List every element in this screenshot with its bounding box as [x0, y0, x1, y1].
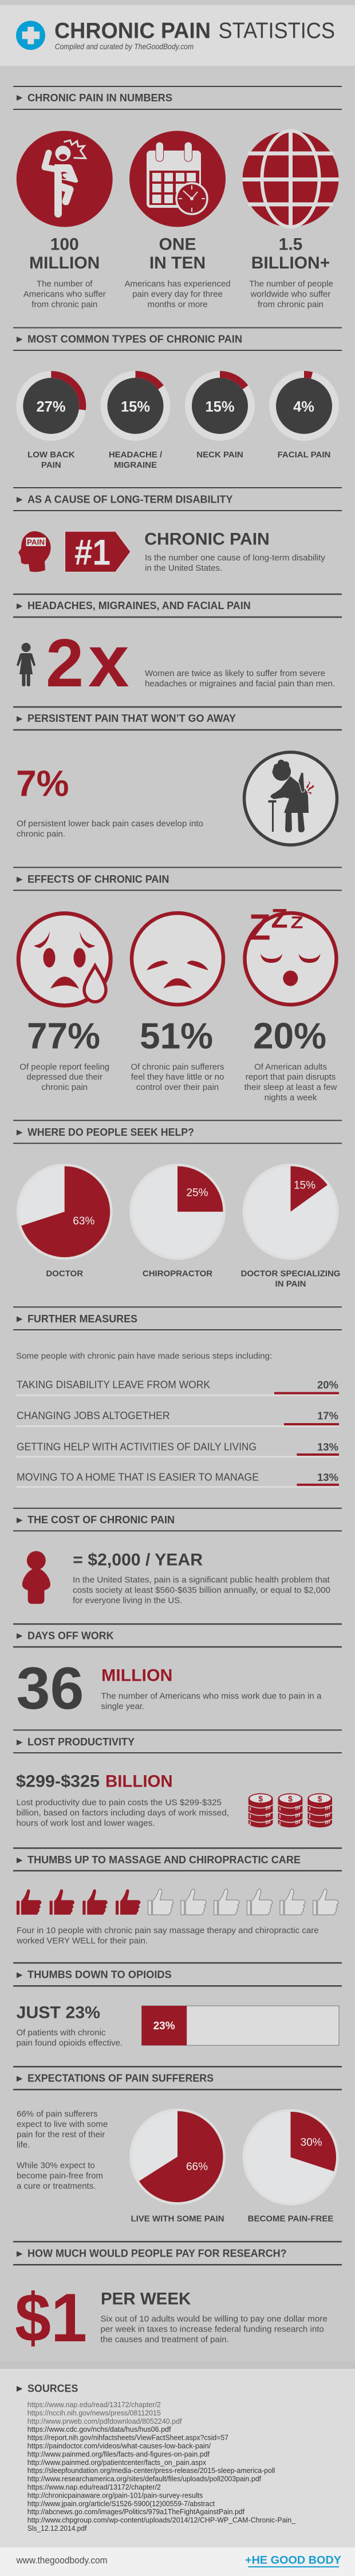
section: thumbs up	[13, 1847, 342, 1946]
stat: 1.5 billion	[243, 131, 339, 310]
source list: https://www.nap.edu/read/13172/chapter/2	[27, 2400, 161, 2409]
heading: thumbs down	[13, 1962, 342, 1986]
source list: http://chronicpainaware.org/pain-101/pain-survey-results	[27, 2491, 203, 2499]
bar row: changing jobs 17%: 17%	[317, 1410, 338, 1422]
value: just 23%: JUST 23%	[16, 2004, 100, 2022]
section: chronic pain in numbers	[13, 86, 342, 310]
progress bar: 23%	[142, 2006, 339, 2045]
heading: thumbs down: THUMBS DOWN TO OPIOIDS	[27, 1969, 172, 1980]
heading: most common types: MOST COMMON TYPES OF CHRONIC PAIN	[27, 334, 242, 345]
heading: most common types	[13, 327, 342, 351]
bar row: disability leave 20%: TAKING DISABILITY LEAVE FROM WORK	[17, 1378, 211, 1390]
description: Women are twice as likely to suffer from severe	[145, 669, 325, 678]
description: The number of	[37, 279, 93, 289]
icon: coin stacks: $	[258, 1794, 263, 1803]
source list	[27, 2400, 296, 2532]
badge: number one: #1	[74, 533, 111, 573]
heading: chronic pain in numbers: CHRONIC PAIN IN NUMBERS	[27, 92, 172, 104]
bar row: moving home 13%: 13%	[317, 1471, 338, 1483]
donut: low back pain 27%	[16, 371, 86, 470]
pie: doctor 63%	[17, 1164, 113, 1278]
donut: headache 15%: HEADACHE /	[109, 450, 163, 460]
heading: pay for research	[13, 2241, 342, 2266]
description: 20%: their sleep at least a few	[244, 1082, 337, 1092]
donut: facial pain 4%: 4%	[293, 399, 314, 415]
heading: expectations	[13, 2066, 342, 2091]
source list: http://www.jpain.org/article/S1526-5900(12)00559-7/abstract	[27, 2499, 215, 2508]
big number: 2x: 2	[46, 625, 84, 701]
heading: thumbs up	[13, 1847, 342, 1871]
stat: 77%: 77%	[27, 1016, 100, 1057]
icon: coin stacks: $	[318, 1794, 322, 1803]
bar row: moving home 13%: MOVING TO A HOME THAT IS EASIER TO MANAGE	[17, 1471, 259, 1483]
face: sleeping	[245, 904, 337, 1005]
pie: chiropractor 25%	[129, 1164, 226, 1278]
section: persistent pain	[13, 706, 342, 845]
description: chronic pain.	[17, 829, 65, 839]
heading: effects	[13, 867, 342, 891]
bar row: disability leave 20%	[16, 1378, 339, 1396]
donut: headache 15%	[101, 371, 171, 470]
title second part: STATISTICS	[219, 18, 335, 44]
description: 77%: Of people report feeling	[19, 1062, 109, 1072]
donut: headache 15%: MIGRAINE	[114, 460, 157, 470]
heading: days off work: DAYS OFF WORK	[27, 1630, 113, 1641]
pie: become pain-free 30%: BECOME PAIN-FREE	[248, 2214, 333, 2223]
source list: http://www.prweb.com/pdfdownload/8052240.pdf	[27, 2417, 182, 2425]
pie: doctor 63%: 63%	[73, 1215, 94, 1227]
big number: 2x: x	[88, 620, 129, 702]
heading: headaches: HEADACHES, MIGRAINES, AND FACIAL PAIN	[27, 600, 251, 611]
heading: further measures	[13, 1306, 342, 1330]
description: 20%: nights a week	[265, 1093, 317, 1103]
website: www.thegoodbody.com	[16, 2555, 108, 2566]
description: 66%: life.	[17, 2140, 30, 2150]
section: long-term disability	[13, 487, 342, 573]
description: Is the number one cause of long-term disability	[145, 553, 325, 563]
description: Of persistent lower back pain cases develop into	[17, 819, 203, 828]
icon: coin stacks	[249, 1793, 332, 1827]
pie: doctor 63%: DOCTOR	[46, 1269, 83, 1278]
section: days off work	[13, 1623, 342, 1722]
donut: neck pain 15%: 15%	[205, 399, 235, 415]
big number: 100	[50, 235, 79, 254]
description: Four in 10 people with chronic pain say massage therapy and chiropractic care	[17, 1926, 319, 1935]
pie: pain specialist 15%: DOCTOR SPECIALIZING	[241, 1269, 340, 1278]
donut: low back pain 27%: LOW BACK	[27, 450, 75, 460]
description: per week in taxes to increase federal funding research into	[101, 2325, 324, 2334]
pie: chiropractor 25%: 25%	[186, 1187, 208, 1199]
description: single year.	[101, 1701, 144, 1711]
heading: headaches	[13, 594, 342, 618]
donut: neck pain 15%: NECK PAIN	[196, 450, 243, 460]
description: The number of people	[249, 279, 333, 289]
description: The number of Americans who miss work due to pain in a	[101, 1691, 322, 1701]
source list: https://nccih.nih.gov/news/press/08112015	[27, 2408, 161, 2417]
bar row: changing jobs 17%: CHANGING JOBS ALTOGETHER	[17, 1409, 170, 1421]
value: per week: PER WEEK	[101, 2290, 191, 2309]
pie: live with some pain 66%	[129, 2109, 226, 2223]
donut: neck pain 15%	[185, 371, 255, 460]
description: 30%: become pain-free from	[17, 2171, 103, 2181]
section: pay for research	[13, 2241, 342, 2356]
thumbs: 4 of 10 highlighted	[16, 1889, 338, 1915]
description: 20%: Of American adults	[254, 1062, 327, 1072]
heading: persistent pain: PERSISTENT PAIN THAT WON’T GO AWAY	[27, 713, 236, 724]
heading: effects: EFFECTS OF CHRONIC PAIN	[27, 874, 169, 885]
face: crying	[18, 914, 111, 1005]
section: where do people seek help	[13, 1120, 342, 1289]
bar row: moving home 13%	[16, 1471, 339, 1488]
pie: pain specialist 15%: 15%	[294, 1180, 315, 1192]
subtitle: Compiled and curated by TheGoodBody.com	[55, 42, 194, 51]
description: in the United States.	[145, 563, 222, 573]
description: worked VERY WELL for their pain.	[16, 1936, 148, 1946]
description: 77%: chronic pain	[41, 1082, 88, 1092]
description: In the United States, pain is a significant public health problem that	[73, 1575, 330, 1585]
big number: $1: $1	[15, 2279, 87, 2356]
icon: person in pain	[17, 131, 113, 227]
value: range: $299-$325	[16, 1772, 100, 1791]
description: from chronic pain	[258, 300, 324, 310]
source list: https://www.cdc.gov/nchs/data/hus/hus06.pdf	[27, 2425, 171, 2433]
description: 51%: Of chronic pain sufferers	[131, 1062, 224, 1072]
source list: http://www.painmed.org/files/facts-and-figures-on-pain.pdf	[27, 2449, 210, 2458]
heading: long-term disability	[13, 487, 342, 511]
face: sleeping: Z	[291, 914, 303, 933]
description: pain every day for three	[132, 290, 223, 299]
icon: head with pain label	[18, 531, 51, 572]
heading: cost: THE COST OF CHRONIC PAIN	[27, 1514, 175, 1526]
intro text: Some people with chronic pain have made serious steps including:	[16, 1352, 272, 1361]
icon: head with pain label: PAIN	[27, 538, 45, 546]
section: expectations	[13, 2066, 342, 2223]
donut: facial pain 4%	[269, 371, 339, 460]
heading: seek help: WHERE DO PEOPLE SEEK HELP?	[27, 1127, 194, 1138]
source list: Sls_12.12.2014.pdf	[27, 2524, 87, 2532]
icon: medical cross logo	[16, 21, 45, 50]
icon: globe	[243, 131, 339, 227]
heading: expectations: EXPECTATIONS OF PAIN SUFFERERS	[27, 2073, 214, 2084]
stat: 100 million	[17, 131, 113, 310]
description: worldwide who suffer	[250, 290, 330, 299]
source list: http://www.chpgroup.com/wp-content/uploads/2014/12/CHP-WP_CAM-Chronic-Pain_	[27, 2516, 296, 2524]
icon: woman	[17, 643, 36, 686]
big number: 1.5	[279, 235, 302, 254]
description: costs society at least $560-$635 billion annually, or equal to $2,000	[73, 1586, 330, 1595]
pie: live with some pain 66%: 66%	[186, 2161, 208, 2173]
donut: low back pain 27%: PAIN	[41, 460, 61, 470]
section: cost	[13, 1508, 342, 1606]
big number second line: IN TEN	[149, 254, 206, 272]
pie: live with some pain 66%: LIVE WITH SOME PAIN	[131, 2214, 224, 2223]
big number: 2x	[46, 620, 129, 702]
big number second line: MILLION	[29, 254, 100, 272]
description: 66%: 66% of pain sufferers	[17, 2109, 97, 2119]
heading: sources: SOURCES	[27, 2383, 78, 2394]
bar row: disability leave 20%: 20%	[317, 1379, 338, 1391]
big number: 36: 36	[16, 1656, 84, 1722]
description: 30%: a cure or treatments.	[17, 2182, 96, 2191]
description: 77%: depressed due their	[26, 1072, 102, 1082]
description: headaches or migraines and facial pain than men.	[145, 679, 335, 689]
section: thumbs down	[13, 1962, 342, 2048]
pie: become pain-free 30%: 30%	[301, 2136, 322, 2148]
description: from chronic pain	[31, 300, 97, 310]
heading: pay for research: HOW MUCH WOULD PEOPLE PAY FOR RESEARCH?	[27, 2248, 287, 2259]
stat: one in ten	[124, 131, 231, 310]
source list: https://report.nih.gov/nihfactsheets/ViewFactSheet.aspx?csid=57	[27, 2433, 228, 2442]
heading: persistent pain	[13, 706, 342, 730]
pie: pain specialist 15%	[241, 1164, 340, 1289]
source list: https://sleepfoundation.org/media-center/press-release/2015-sleep-america-poll	[27, 2466, 275, 2475]
big number second line: BILLION+	[251, 254, 330, 272]
bar row: daily living 13%	[16, 1440, 339, 1457]
heading: cost	[13, 1508, 342, 1531]
stat: 51%: 51%	[140, 1016, 213, 1057]
description: 20%: report that pain disrupts	[246, 1072, 336, 1082]
bar row: daily living 13%: 13%	[317, 1441, 338, 1453]
section: effects of chronic pain	[13, 867, 342, 1103]
section: lost productivity	[13, 1729, 342, 1828]
section: most common types	[13, 327, 342, 470]
bar row: changing jobs 17%	[16, 1409, 339, 1427]
header band	[0, 5, 355, 66]
title: CHRONIC PAIN	[54, 18, 211, 44]
icon: calendar and clock	[129, 131, 226, 227]
description: 30%: While 30% expect to	[17, 2161, 95, 2171]
heading: lost productivity: LOST PRODUCTIVITY	[27, 1736, 135, 1748]
source list: http://abcnews.go.com/images/Politics/979a1TheFightAgainstPain.pdf	[27, 2507, 244, 2516]
icon: person	[22, 1551, 50, 1604]
heading: further measures: FURTHER MEASURES	[27, 1313, 137, 1325]
icon: coin stacks: $	[288, 1794, 293, 1803]
heading: lost productivity	[13, 1729, 342, 1753]
description: the causes and treatment of pain.	[101, 2335, 229, 2345]
heading: seek help	[13, 1120, 342, 1144]
description: for everyone living in the US.	[73, 1596, 182, 1606]
stat: 20%: 20%	[253, 1016, 326, 1057]
description: Americans has experienced	[124, 279, 231, 289]
pie: pain specialist 15%: IN PAIN	[275, 1279, 306, 1289]
description: billion, based on factors including days of work missed,	[16, 1808, 229, 1818]
footer	[0, 2547, 355, 2576]
pie: chiropractor 25%: CHIROPRACTOR	[143, 1269, 212, 1278]
donut: facial pain 4%: FACIAL PAIN	[278, 450, 330, 460]
heading: thumbs up: THUMBS UP TO MASSAGE AND CHIROPRACTIC CARE	[27, 1854, 301, 1866]
heading: chronic pain in numbers	[13, 86, 342, 110]
description: Of patients with chronic	[16, 2028, 106, 2037]
description: Lost productivity due to pain costs the US $299-$325	[16, 1797, 222, 1807]
face: sleeping: Z	[271, 904, 287, 934]
description: 51%: control over their pain	[136, 1082, 219, 1092]
value: = $2,000 / YEAR	[73, 1550, 203, 1569]
pie: become pain-free 30%	[243, 2109, 339, 2223]
heading: days off work	[13, 1623, 342, 1647]
donut: headache 15%: 15%	[121, 399, 150, 415]
face: sleeping: Z	[249, 907, 270, 948]
panel: sources	[0, 2361, 355, 2547]
description: months or more	[147, 300, 208, 310]
bar row: daily living 13%: GETTING HELP WITH ACTIVITIES OF DAILY LIVING	[17, 1440, 257, 1452]
heading: chronic pain: CHRONIC PAIN	[144, 530, 270, 549]
progress bar: 23%: 23%	[153, 2020, 175, 2032]
face: sad	[132, 913, 223, 1005]
donut: low back pain 27%: 27%	[36, 399, 66, 415]
section: further measures	[13, 1306, 342, 1488]
heading: long-term disability: AS A CAUSE OF LONG-TERM DISABILITY	[27, 494, 232, 505]
description: 51%: feel they have little or no	[131, 1072, 224, 1082]
unit: MILLION	[101, 1666, 172, 1685]
big number: 7%: 7%	[16, 763, 69, 804]
description: 66%: expect to live with some	[17, 2120, 108, 2129]
source list: http://www.painmed.org/patientcenter/facts_on_pain.aspx	[27, 2458, 206, 2467]
source list: http://www.researchamerica.org/sites/default/files/uploads/poll2003pain.pdf	[27, 2475, 261, 2483]
source list: https://www.nap.edu/read/13172/chapter/2	[27, 2483, 161, 2491]
big number: ONE	[159, 235, 196, 254]
badge: number one	[65, 531, 131, 573]
icon: elderly woman with cane	[244, 752, 337, 845]
description: Americans who suffer	[23, 290, 106, 299]
description: Six out of 10 adults would be willing to pay one dollar more	[101, 2314, 328, 2324]
source list: https://paindoctor.com/videos/what-causes-low-back-pain/	[27, 2441, 211, 2450]
value: billion: BILLION	[105, 1772, 173, 1791]
description: hours of work lost and lower wages.	[16, 1818, 155, 1828]
section: headaches	[13, 594, 342, 702]
description: 66%: pain for the rest of their	[17, 2130, 105, 2140]
logo: the good body: +HE GOOD BODY	[245, 2554, 341, 2566]
description: pain found opioids effective.	[16, 2038, 123, 2048]
